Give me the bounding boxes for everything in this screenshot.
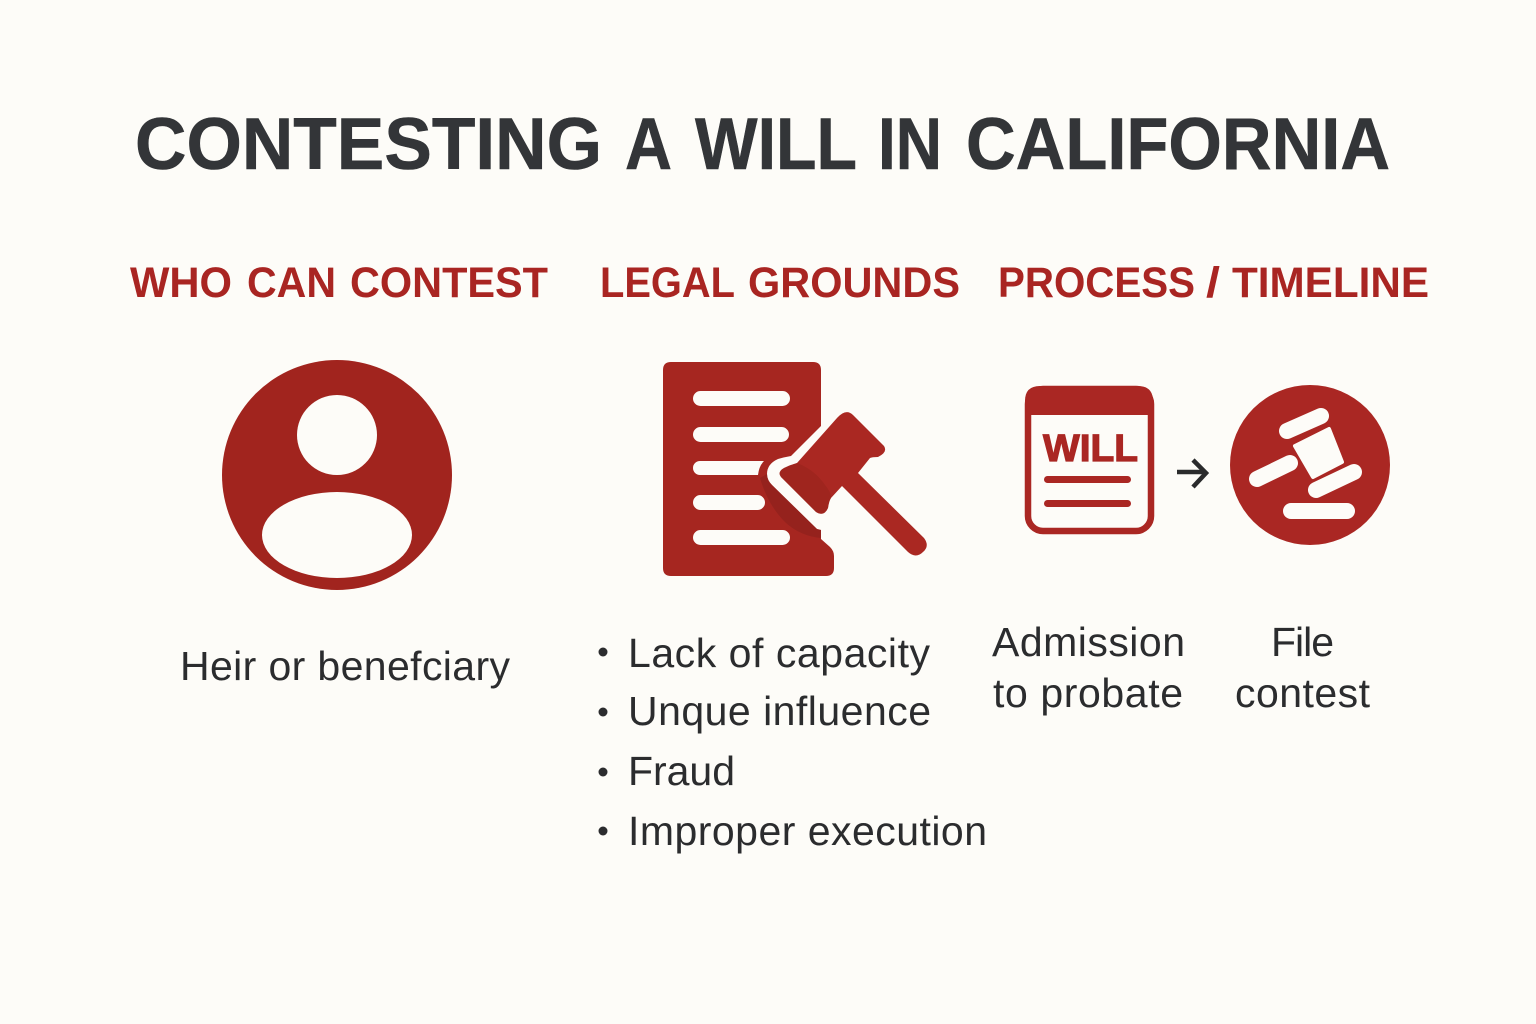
title [135, 104, 1390, 185]
heading: legal grounds [600, 259, 960, 307]
bullet item: improper execution: Improper execution [628, 808, 987, 854]
arrow [1177, 460, 1206, 487]
icon: gavel in circle [1230, 385, 1390, 545]
label: admission to probate: Admission [992, 619, 1185, 665]
label: file contest: contest [1235, 670, 1371, 716]
label: heir or beneficiary: Heir or benefciary [180, 643, 510, 689]
bullet item: lack of capacity: Lack of capacity [628, 630, 930, 676]
heading: process / timeline [998, 259, 1429, 307]
document shadow [760, 474, 821, 538]
title: CALIFORNIA [966, 104, 1390, 185]
title: CONTESTING [135, 104, 602, 185]
gavel shadow [780, 463, 831, 514]
title: WILL [695, 104, 857, 185]
icon: document with gavel [663, 362, 927, 576]
heading: who can contest: CAN [247, 259, 336, 307]
label: file contest: File [1271, 619, 1334, 665]
will label: WILL [1043, 428, 1138, 470]
heading: process / timeline: PROCESS [998, 259, 1195, 307]
heading: who can contest: CONTEST [350, 259, 548, 307]
heading: who can contest: WHO [130, 259, 232, 307]
heading: who can contest [130, 259, 548, 307]
title: A [625, 104, 672, 185]
list: legal grounds [598, 630, 987, 854]
icon: person in circle [222, 360, 452, 590]
bullet item: undue influence: Unque influence [628, 688, 931, 734]
label: admission to probate: to probate [993, 670, 1183, 716]
heading: process / timeline: TIMELINE [1232, 259, 1429, 307]
title: IN [878, 104, 942, 185]
document text lines [693, 391, 790, 545]
icon: will document [1025, 386, 1153, 531]
gavel [780, 412, 927, 556]
label: admission to probate [992, 619, 1185, 716]
document [663, 362, 834, 576]
heading: process / timeline: / [1206, 259, 1220, 307]
heading: legal grounds: GROUNDS [748, 259, 960, 307]
label: file contest [1235, 619, 1371, 716]
heading: legal grounds: LEGAL [600, 259, 735, 307]
bullet item: fraud: Fraud [628, 748, 735, 794]
